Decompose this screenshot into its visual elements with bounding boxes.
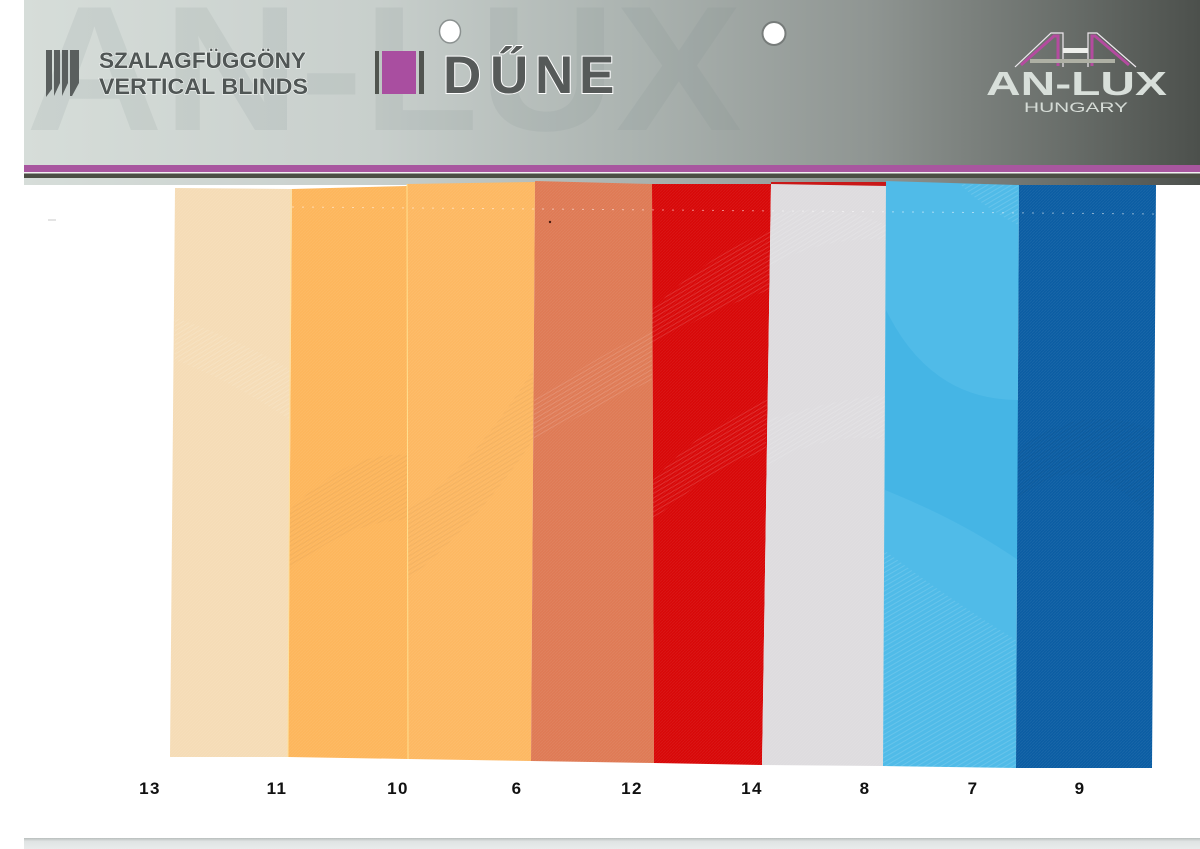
logo subtitle: HUNGARY [1024, 99, 1129, 115]
fabric swatches [170, 181, 1156, 768]
icon: vertical blinds [46, 50, 79, 97]
product type heading: SZALAGFÜGGÖNY [99, 48, 306, 73]
header band [24, 0, 1200, 185]
swatch 12: red [652, 182, 886, 765]
footer band [24, 838, 1200, 849]
AN-LUX Hungary logo [986, 33, 1167, 115]
product type heading: VERTICAL BLINDS [99, 74, 308, 99]
colour code labels: 9 [1075, 779, 1085, 798]
colour code labels: 11 [267, 779, 287, 798]
colour code labels [139, 779, 1085, 798]
stitching line [292, 207, 1156, 214]
swatch 14: light grey [762, 184, 887, 766]
swatch 6: terracotta [531, 181, 654, 763]
icon: purple swatch [375, 51, 424, 94]
logo wordmark: AN-LUX [986, 65, 1167, 102]
swatch 11: light orange [288, 186, 408, 759]
product name: DŰNE: DŰNE [443, 45, 614, 105]
small scan mark [48, 220, 56, 221]
swatch 10: orange [407, 182, 535, 761]
colour code labels: 6 [512, 779, 522, 798]
colour code labels: 12 [621, 779, 643, 798]
punched holes [440, 20, 786, 45]
swatch 13: cream [170, 188, 292, 757]
colour code labels: 7 [968, 779, 978, 798]
swatch 9: dark blue [1016, 185, 1156, 768]
colour code labels: 13 [139, 779, 161, 798]
colour code labels: 10 [387, 779, 409, 798]
logo mark [1015, 33, 1136, 67]
colour code labels: 8 [860, 779, 870, 798]
colour code labels: 14 [741, 779, 763, 798]
swatch 7: sky blue [883, 181, 1019, 768]
product type heading [99, 48, 308, 99]
purple and dark header stripes [24, 165, 1200, 178]
